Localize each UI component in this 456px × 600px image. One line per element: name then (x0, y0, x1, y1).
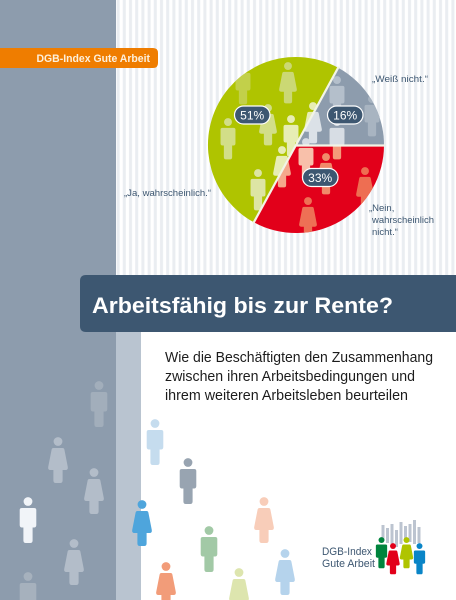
subtitle (165, 350, 433, 404)
logo bars (382, 520, 420, 547)
title banner (80, 275, 456, 332)
slice dividers (253, 67, 385, 223)
label: Nein, wahrscheinlich nicht: „Nein, (369, 203, 394, 214)
logo: DGB-Index Gute Arbeit (322, 520, 425, 574)
light grey column strip (116, 330, 141, 600)
subtitle: Wie die Beschäftigten den Zusammenhang (165, 350, 433, 366)
logo wordmark: DGB-Index (322, 546, 372, 558)
orange tag: DGB-Index Gute Arbeit (0, 48, 158, 68)
label: Nein, wahrscheinlich nicht: nicht.“ (372, 227, 398, 238)
subtitle: ihrem weiteren Arbeitsleben beurteilen (165, 388, 408, 404)
logo figures (376, 537, 425, 574)
pill: 51% (234, 106, 270, 124)
pill: 33% (302, 168, 338, 186)
label: Nein, wahrscheinlich nicht (369, 203, 434, 238)
slice: Ja 51% (208, 57, 338, 222)
label: Ja, wahrscheinlich: „Ja, wahrscheinlich.“ (124, 188, 211, 199)
slice: Nein 33% (254, 146, 384, 233)
title banner: Arbeitsfähig bis zur Rente? (92, 293, 393, 318)
crowd of people (20, 381, 295, 600)
striped background (116, 0, 456, 276)
grey side column (0, 0, 116, 600)
orange tag: DGB-Index Gute Arbeit: DGB-Index Gute Arbeit (36, 53, 150, 65)
pill: 33%: 33% (308, 171, 333, 185)
label: Nein, wahrscheinlich nicht: wahrscheinlich (371, 215, 434, 226)
pill: 51%: 51% (240, 108, 265, 122)
logo wordmark (322, 546, 375, 570)
subtitle: zwischen ihren Arbeitsbedingungen und (165, 369, 415, 385)
slice: Weiß nicht 16% (298, 68, 384, 144)
label: Weiß nicht: „Weiß nicht.“ (372, 74, 428, 85)
pill: 16%: 16% (333, 108, 358, 122)
pie chart (208, 57, 385, 233)
logo wordmark: Gute Arbeit (322, 558, 375, 570)
pill: 16% (328, 106, 363, 124)
